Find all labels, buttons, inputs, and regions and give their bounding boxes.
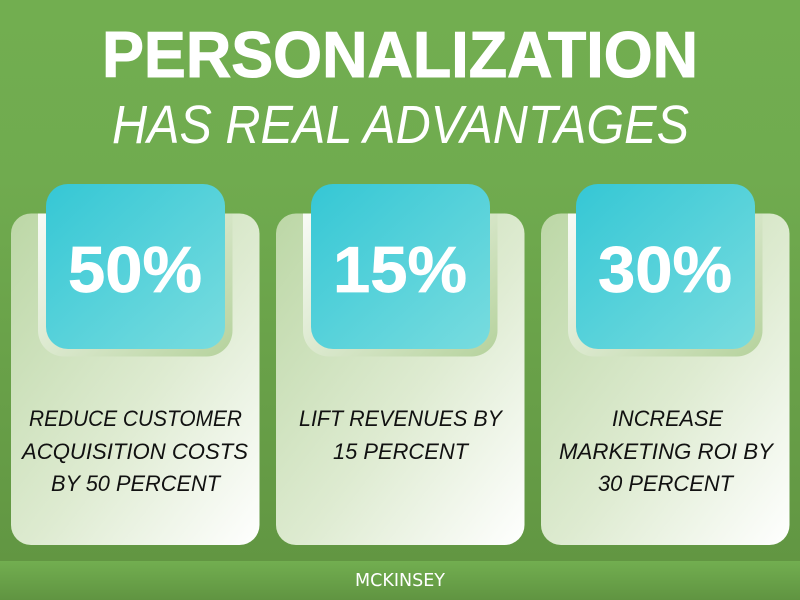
- description text: MARKETING ROI BY: [559, 439, 774, 464]
- subtitle: HAS REAL ADVANTAGES: [112, 95, 689, 155]
- panel: increase marketing ROI: [541, 180, 790, 545]
- badge: 15%: [311, 184, 490, 349]
- badge: 50%: 50%: [68, 233, 202, 306]
- card background: [541, 214, 790, 545]
- description text: REDUCE CUSTOMER: [29, 406, 242, 431]
- card inset behind badge: [303, 214, 498, 356]
- description text: ACQUISITION COSTS: [20, 439, 248, 464]
- description text: 15 PERCENT: [333, 439, 470, 464]
- description text: LIFT REVENUES BY: [299, 406, 503, 431]
- description text: BY 50 PERCENT: [51, 471, 222, 496]
- description text: INCREASE: [612, 406, 723, 431]
- card background: [276, 214, 524, 545]
- description text: 30 PERCENT: [598, 471, 735, 496]
- badge: 30%: [576, 184, 755, 349]
- card inset behind badge: [568, 214, 762, 356]
- description text: [20, 406, 248, 496]
- source label: MCKINSEY: [355, 570, 446, 591]
- badge: 50%: [46, 184, 225, 349]
- panel: reduce acquisition costs: [11, 180, 260, 545]
- panel: lift revenues: [276, 180, 524, 545]
- description text: [299, 406, 503, 464]
- description text: [559, 406, 774, 496]
- title: PERSONALIZATION: [102, 18, 698, 91]
- card background: [11, 214, 260, 545]
- badge: 15%: 15%: [333, 233, 467, 306]
- badge: 30%: 30%: [598, 233, 732, 306]
- card inset behind badge: [38, 214, 232, 356]
- footer band: [0, 561, 800, 600]
